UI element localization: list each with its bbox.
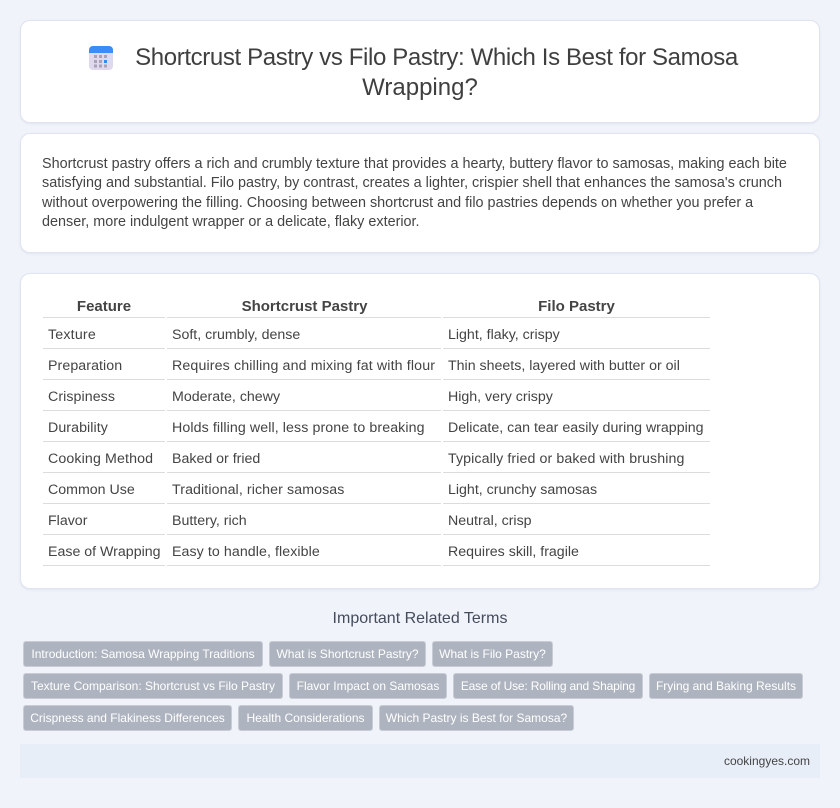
related terms tags: What is Shortcrust Pastry?: [276, 647, 419, 661]
header panel: [20, 20, 820, 123]
related terms tags: Flavor Impact on Samosas: [297, 679, 439, 693]
intro paragraph: [42, 156, 787, 230]
table header: Filo Pastry: [538, 298, 615, 315]
footer bar: [20, 744, 820, 778]
comparison table: Moderate, chewy: [172, 389, 280, 405]
comparison table: Typically fried or baked with brushing: [448, 451, 684, 467]
comparison table: Baked or fried: [172, 451, 260, 467]
table header: Shortcrust Pastry: [242, 298, 367, 315]
related terms tags: Frying and Baking Results: [656, 679, 796, 693]
related terms tags: Which Pastry is Best for Samosa?: [386, 711, 567, 725]
related terms tags: [23, 641, 803, 731]
comparison table: Requires skill, fragile: [448, 544, 579, 560]
related terms tags: Introduction: Samosa Wrapping Traditions: [31, 647, 255, 661]
icon: calendar grid: [89, 46, 113, 70]
comparison table: Cooking Method: [48, 451, 153, 467]
title: [135, 44, 738, 101]
intro paragraph: denser, more indulgent wrapper or a delicate, flaky exterior.: [42, 214, 420, 230]
comparison table: Holds filling well, less prone to breaking: [172, 420, 425, 436]
related terms heading: Important Related Terms: [333, 610, 507, 627]
comparison table: Easy to handle, flexible: [172, 544, 320, 560]
comparison table: Neutral, crisp: [448, 513, 532, 529]
source credit: cookingyes.com: [724, 754, 810, 768]
comparison table: Light, crunchy samosas: [448, 482, 597, 498]
table header: [77, 298, 615, 315]
comparison table: Preparation: [48, 358, 122, 374]
comparison table: Delicate, can tear easily during wrapping: [448, 420, 704, 436]
comparison table: Buttery, rich: [172, 513, 247, 529]
comparison table: Light, flaky, crispy: [448, 327, 560, 343]
comparison table: Ease of Wrapping: [48, 544, 161, 560]
comparison table: Crispiness: [48, 389, 115, 405]
comparison table: Texture: [48, 327, 96, 343]
table header: Feature: [77, 298, 131, 315]
comparison table: Flavor: [48, 513, 87, 529]
intro paragraph: satisfying and substantial. Filo pastry, by contrast, creates a lighter, crispier shell that enhances the samosa's crunch: [42, 175, 782, 191]
comparison table: Thin sheets, layered with butter or oil: [448, 358, 680, 374]
comparison table: Soft, crumbly, dense: [172, 327, 300, 343]
comparison table: Durability: [48, 420, 108, 436]
related terms tags: Crispness and Flakiness Differences: [30, 711, 225, 725]
panel: intro text: [20, 133, 820, 253]
intro paragraph: Shortcrust pastry offers a rich and crumbly texture that provides a hearty, buttery flavor to samosas, making each bite: [42, 156, 787, 172]
comparison table: High, very crispy: [448, 389, 553, 405]
panel: comparison table: [20, 273, 820, 589]
comparison table: [43, 298, 710, 566]
comparison table: Common Use: [48, 482, 135, 498]
related terms tags: What is Filo Pastry?: [439, 647, 546, 661]
title: Shortcrust Pastry vs Filo Pastry: Which Is Best for Samosa: [135, 44, 738, 71]
related terms tags: Texture Comparison: Shortcrust vs Filo Pastry: [31, 679, 275, 693]
comparison table: Traditional, richer samosas: [172, 482, 344, 498]
intro paragraph: without overpowering the filling. Choosing between shortcrust and filo pastries depends on whether you prefer a: [42, 195, 753, 211]
related terms tags: Ease of Use: Rolling and Shaping: [461, 679, 635, 693]
related terms tags: Health Considerations: [246, 711, 365, 725]
title: Wrapping?: [362, 74, 478, 101]
comparison table: Requires chilling and mixing fat with flour: [172, 358, 435, 374]
